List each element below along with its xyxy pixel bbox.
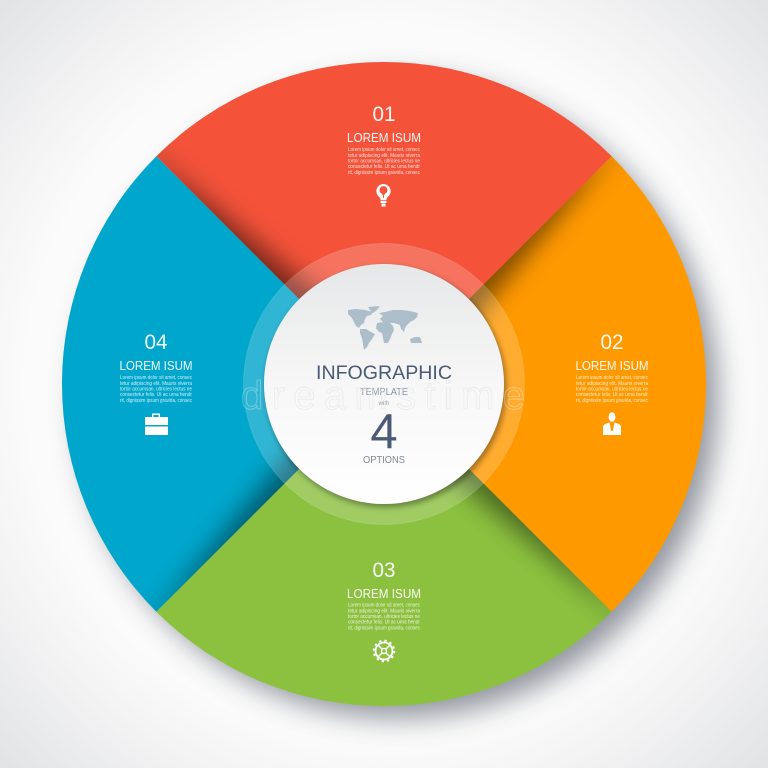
body text 01: rit, dignissim ipsum gravida, consec (348, 170, 420, 176)
panel: option 01 (347, 103, 421, 206)
sector wheel (60, 60, 710, 710)
body text 02: tetur adipiscing elit. Mauris viverra (576, 381, 648, 387)
body text 02: rit, dignissim ipsum gravida, consec (576, 398, 648, 404)
glass ring (244, 244, 524, 524)
body text 04: tetur adipiscing elit. Mauris viverra (120, 381, 192, 387)
heading 01: LOREM ISUM (347, 131, 421, 145)
segment 02 orange (469, 156, 706, 612)
panel: option 02 (576, 331, 648, 435)
heading 03: LOREM ISUM (347, 587, 421, 601)
body text 03: tortor accumsan, ultricies lectus ne (348, 614, 420, 620)
body text 04: consectetur felis. Ut ac urna hendr (120, 392, 192, 398)
body text 03: Lorem ipsum dolor sit amet, consec (348, 602, 420, 608)
subtitle: options: OPTIONS (363, 455, 405, 466)
body text 02 (576, 375, 648, 404)
watermark: dreamstime (241, 374, 525, 418)
icon: person (603, 412, 621, 435)
body text 03 (348, 602, 420, 632)
body text 01: tetur adipiscing elit. Mauris viverra (348, 153, 420, 159)
centre plate shadow (266, 266, 506, 508)
segment 04 blue (62, 156, 299, 612)
body text 02: Lorem ipsum dolor sit amet, consec (576, 375, 648, 381)
icon: world map (348, 306, 422, 350)
body text 03: tetur adipiscing elit. Mauris viverra (348, 608, 420, 614)
body text 01: Lorem ipsum dolor sit amet, consec (348, 147, 420, 153)
icon: gear (374, 641, 394, 661)
number 02: 02 (600, 331, 624, 354)
body text 04 (120, 375, 192, 404)
heading 04: LOREM ISUM (120, 359, 192, 373)
body text 01: tortor accumsan, ultricies lectus ne (348, 158, 420, 164)
segment 01 red (156, 62, 612, 299)
icon: briefcase (145, 414, 168, 435)
icon: light bulb (376, 184, 391, 206)
number 04: 04 (144, 331, 168, 354)
subtitle: with: with (378, 401, 389, 407)
watermark (242, 380, 524, 410)
title: INFOGRAPHIC (316, 362, 452, 384)
body text 04: rit, dignissim ipsum gravida, consec (120, 398, 192, 404)
big number 4: 4 (370, 405, 398, 459)
subtitle: template: TEMPLATE (360, 386, 408, 398)
body text 03: consectetur felis. Ut ac urna hendr (348, 620, 420, 626)
heading 02: LOREM ISUM (576, 359, 648, 373)
watermark: dreamstime (241, 374, 525, 418)
panel: option 03 (347, 559, 421, 661)
body text 01 (348, 147, 420, 176)
centre white plate (264, 264, 504, 504)
wheel drop shadow (78, 78, 718, 718)
body text 02: consectetur felis. Ut ac urna hendr (576, 392, 648, 398)
body text 04: Lorem ipsum dolor sit amet, consec (120, 375, 192, 381)
body text 04: tortor accumsan, ultricies lectus ne (120, 386, 192, 392)
body text 03: rit, dignissim ipsum gravida, consec (348, 626, 420, 632)
number 03: 03 (372, 559, 396, 582)
body text 01: consectetur felis. Ut ac urna hendr (348, 164, 420, 170)
segment 03 green (156, 469, 612, 706)
body text 02: tortor accumsan, ultricies lectus ne (576, 386, 648, 392)
panel: option 04 (120, 331, 192, 435)
number 01: 01 (372, 103, 396, 126)
